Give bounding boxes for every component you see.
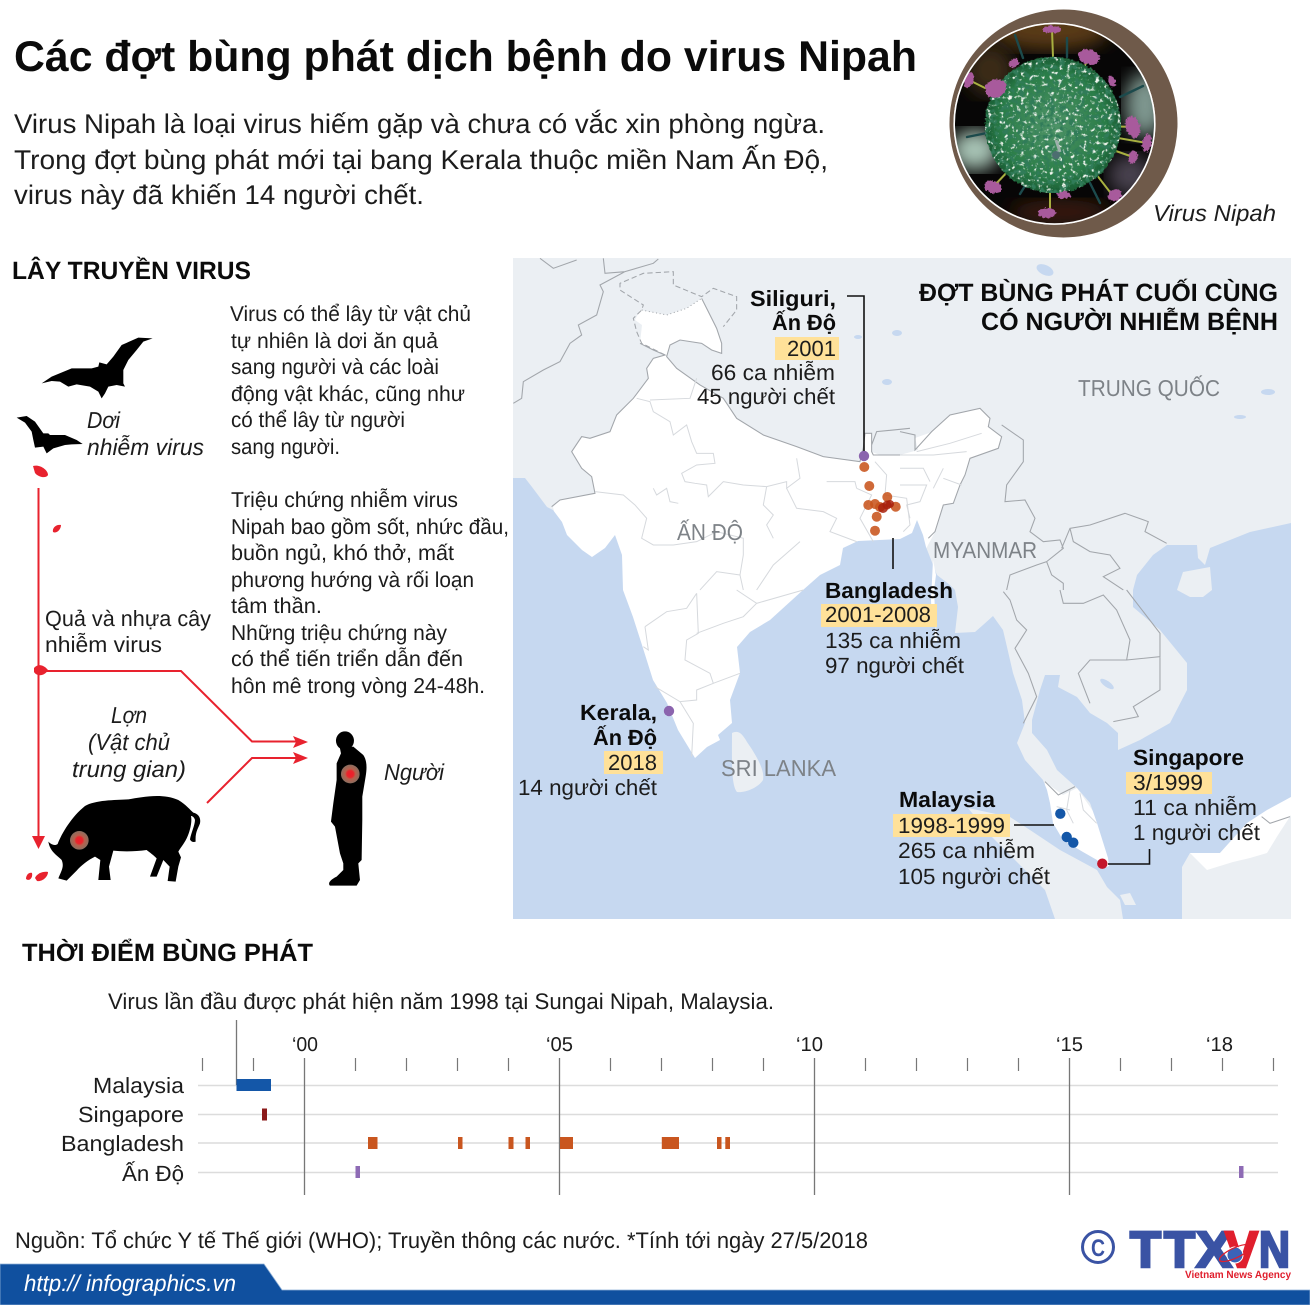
callout: Malaysia: 265 ca nhiễm — [898, 838, 1035, 863]
callout: Siliguri: 45 người chết — [697, 384, 835, 409]
callout: Kerala: 2018 — [608, 750, 657, 775]
row lines — [198, 1086, 1278, 1172]
year labels: ‘15 — [1056, 1034, 1083, 1056]
heading: timeline: THỜI ĐIỂM BÙNG PHÁT — [22, 938, 313, 967]
pig label: trung gian) — [72, 756, 186, 782]
bat label — [87, 407, 204, 460]
source note: Nguồn: Tổ chức Y tế Thế giới (WHO); Truyền thông các nước. *Tính tới ngày 27/5/2018 — [15, 1228, 868, 1253]
year labels: ‘00 — [292, 1034, 318, 1056]
logo: TTXVN — [1082, 1221, 1291, 1281]
callout: Siliguri — [697, 286, 864, 451]
transmission diagram — [17, 338, 445, 886]
fruit label — [45, 606, 211, 657]
text block: symptoms — [231, 488, 509, 698]
bat label: Dơi — [87, 407, 121, 433]
callout: Singapore: 1 người chết — [1133, 820, 1260, 845]
logo: TTXVN: N — [1259, 1221, 1290, 1278]
text block: symptoms: buồn ngủ, khó thở, mất — [231, 541, 454, 565]
country labels: MYANMAR — [933, 537, 1037, 563]
callout: Siliguri: 2001 — [787, 336, 836, 361]
callout: Siliguri: 66 ca nhiễm — [711, 360, 835, 385]
intro text block — [14, 109, 828, 210]
logo: TTXVN: C — [1091, 1235, 1105, 1262]
icon: red drops — [26, 466, 61, 881]
intro text block: Trong đợt bùng phát mới tại bang Kerala thuộc miền Nam Ấn Độ, — [14, 144, 828, 175]
year labels: ‘05 — [546, 1034, 573, 1056]
logo: TTXVN: V — [1225, 1221, 1258, 1278]
callout: Singapore: 11 ca nhiễm — [1133, 795, 1257, 820]
callout: Singapore — [1108, 745, 1260, 864]
callout: Malaysia: Malaysia — [899, 787, 996, 812]
text block: transmission: sang người. — [231, 435, 340, 459]
icon: large bat — [42, 338, 153, 398]
text block: transmission: sang người và các loài — [231, 355, 439, 379]
country labels: TRUNG QUỐC — [1078, 375, 1220, 401]
callout: Bangladesh: 2001-2008 — [825, 602, 931, 627]
virus sphere — [985, 57, 1121, 193]
callout: Bangladesh — [821, 538, 964, 678]
icon: human — [329, 731, 367, 886]
row labels: Malaysia — [93, 1073, 185, 1098]
year labels: ‘18 — [1206, 1034, 1233, 1056]
Malay peninsula land — [1045, 782, 1109, 867]
logo: TTXVN: T — [1164, 1221, 1195, 1278]
callout: Singapore: Singapore — [1133, 745, 1244, 770]
virus spikes — [962, 26, 1153, 218]
footer bar — [0, 1264, 1310, 1305]
human label: Người — [384, 759, 445, 785]
map heading: ĐỢT BÙNG PHÁT CUỐI CÙNG — [919, 278, 1278, 307]
callout: Bangladesh: 135 ca nhiễm — [825, 628, 961, 653]
outbreak points — [664, 451, 1108, 869]
row labels: Bangladesh — [61, 1131, 184, 1156]
heading: transmission: LÂY TRUYỀN VIRUS — [12, 256, 251, 285]
arrow: bat to pig — [32, 488, 45, 849]
map borders SE — [1003, 590, 1290, 823]
timeline note: Virus lần đầu được phát hiện năm 1998 tại Sungai Nipah, Malaysia. — [108, 989, 774, 1014]
callout: Siliguri: Siliguri, — [750, 286, 836, 311]
virus stalks — [967, 30, 1147, 213]
India and Bangladesh land — [553, 298, 1002, 800]
year labels — [292, 1034, 1233, 1056]
country labels: SRI LANKA — [721, 755, 837, 781]
icon: small bat — [17, 416, 83, 453]
logo: TTXVN: T — [1130, 1221, 1161, 1278]
arrow: fruit to human — [40, 671, 308, 748]
callout: Malaysia: 1998-1999 — [898, 813, 1005, 838]
text block: transmission: Virus có thể lây từ vật chủ — [230, 302, 471, 326]
map heading: CÓ NGƯỜI NHIỄM BỆNH — [981, 307, 1278, 336]
pig label: Lợn — [111, 702, 147, 728]
fruit label: nhiễm virus — [45, 632, 162, 657]
country labels — [677, 375, 1220, 781]
outbreak bars — [236, 1079, 1244, 1178]
title: Các đợt bùng phát dịch bệnh do virus Nipah — [14, 33, 917, 81]
year labels: ‘10 — [796, 1034, 823, 1056]
bat label: nhiễm virus — [87, 434, 204, 460]
callout: Kerala: Ấn Độ — [593, 725, 657, 750]
callout: Siliguri: Ấn Độ — [772, 310, 836, 335]
intro text block: virus này đã khiến 14 người chết. — [14, 180, 424, 210]
arrow: pig to human — [207, 752, 308, 803]
text block: symptoms: tâm thần. — [231, 594, 322, 618]
text block: symptoms: có thể tiến triển dẫn đến — [231, 647, 463, 671]
map borders East — [900, 408, 1167, 590]
map borders NW — [513, 258, 910, 590]
footer bar: http:// infographics.vn — [24, 1270, 236, 1296]
callout: Malaysia — [893, 787, 1054, 889]
callout: Kerala: Kerala, — [580, 700, 657, 725]
text block: transmission — [230, 302, 471, 459]
timeline chart — [61, 1020, 1278, 1195]
map heading — [919, 278, 1278, 336]
panel: map — [513, 258, 1291, 919]
pig label: (Vật chủ — [88, 729, 170, 755]
row labels: Ấn Độ — [122, 1161, 184, 1186]
text block: symptoms: hôn mê trong vòng 24-48h. — [231, 674, 485, 698]
virus caption: Virus Nipah — [1153, 200, 1276, 226]
text block: symptoms: Nipah bao gồm sốt, nhức đầu, — [231, 515, 509, 539]
callout: Singapore: 3/1999 — [1133, 770, 1203, 795]
islands — [732, 567, 1291, 919]
callout: Malaysia: 105 người chết — [898, 864, 1050, 889]
text block: transmission: tự nhiên là dơi ăn quả — [231, 329, 438, 353]
callout: Bangladesh: 97 người chết — [825, 653, 964, 678]
pig label — [72, 702, 186, 782]
country labels: ẤN ĐỘ — [677, 519, 743, 545]
text block: transmission: có thể lây từ người — [231, 408, 405, 432]
intro text block: Virus Nipah là loại virus hiếm gặp và chưa có vắc xin phòng ngừa. — [14, 109, 825, 139]
virus illustration — [950, 10, 1178, 238]
map borders SW — [643, 590, 803, 757]
text block: transmission: động vật khác, cũng như — [231, 382, 465, 406]
callout: Kerala — [518, 700, 663, 800]
text block: symptoms: Những triệu chứng này — [231, 621, 447, 645]
row labels — [61, 1073, 185, 1186]
logo: TTXVN: Vietnam News Agency — [1185, 1269, 1291, 1281]
callout: Bangladesh: Bangladesh — [825, 578, 953, 603]
sea — [513, 478, 1291, 919]
row labels: Singapore — [78, 1102, 184, 1127]
icon: pig — [48, 796, 200, 882]
fruit label: Quả và nhựa cây — [45, 606, 211, 631]
text block: symptoms: phương hướng và rối loạn — [231, 568, 474, 592]
callout: Kerala: 14 người chết — [518, 775, 657, 800]
text block: symptoms: Triệu chứng nhiễm virus — [231, 488, 458, 512]
lakes — [854, 262, 1275, 691]
logo: TTXVN: X — [1196, 1221, 1232, 1278]
